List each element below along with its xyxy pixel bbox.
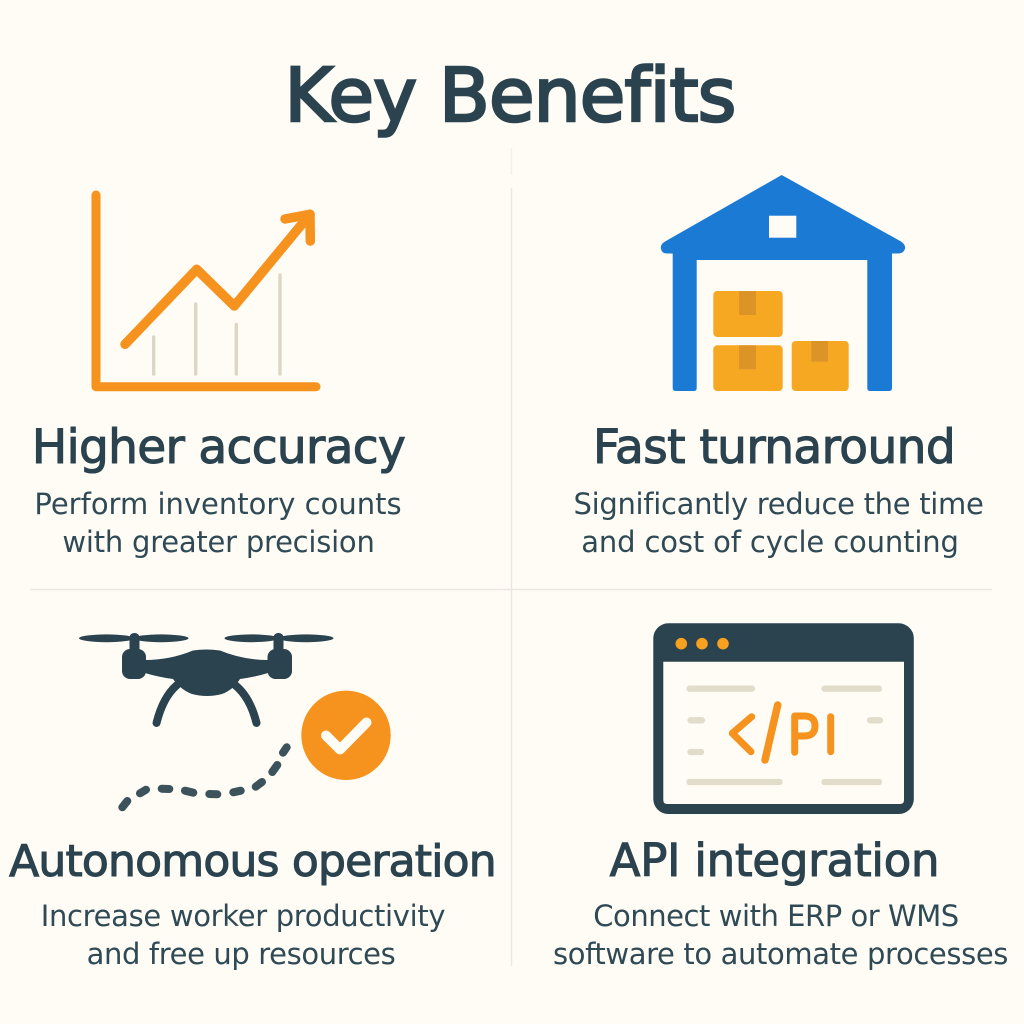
heading: higher accuracy: Higher accuracy — [32, 420, 405, 475]
description: higher accuracy: Perform inventory counts — [34, 487, 402, 521]
icon: drone with check — [79, 633, 391, 807]
description: API integration: Connect with ERP or WMS — [593, 899, 959, 933]
title: Key Benefits — [284, 53, 736, 139]
heading: autonomous operation: Autonomous operation — [9, 836, 496, 886]
icon: accuracy line chart — [96, 195, 316, 387]
description: API integration — [553, 899, 1008, 971]
heading: fast turnaround: Fast turnaround — [593, 420, 955, 475]
description: autonomous operation: Increase worker productivity — [41, 899, 445, 933]
icon: API browser window — [653, 623, 914, 814]
description: higher accuracy — [34, 487, 402, 559]
description: autonomous operation: and free up resources — [87, 937, 395, 971]
description: fast turnaround: and cost of cycle counting — [581, 525, 959, 559]
description: API integration: software to automate processes — [553, 937, 1008, 971]
panel: fast turnaround text — [573, 420, 984, 559]
description: higher accuracy: with greater precision — [62, 525, 375, 559]
panel: API integration text — [553, 834, 1008, 971]
icon: warehouse with boxes — [661, 175, 905, 391]
description: autonomous operation — [41, 899, 445, 971]
description: fast turnaround — [573, 487, 984, 559]
panel: higher accuracy text — [32, 420, 406, 559]
panel: autonomous operation text — [8, 836, 496, 971]
description: fast turnaround: Significantly reduce the time — [573, 487, 984, 521]
heading: API integration: API integration — [610, 834, 939, 887]
